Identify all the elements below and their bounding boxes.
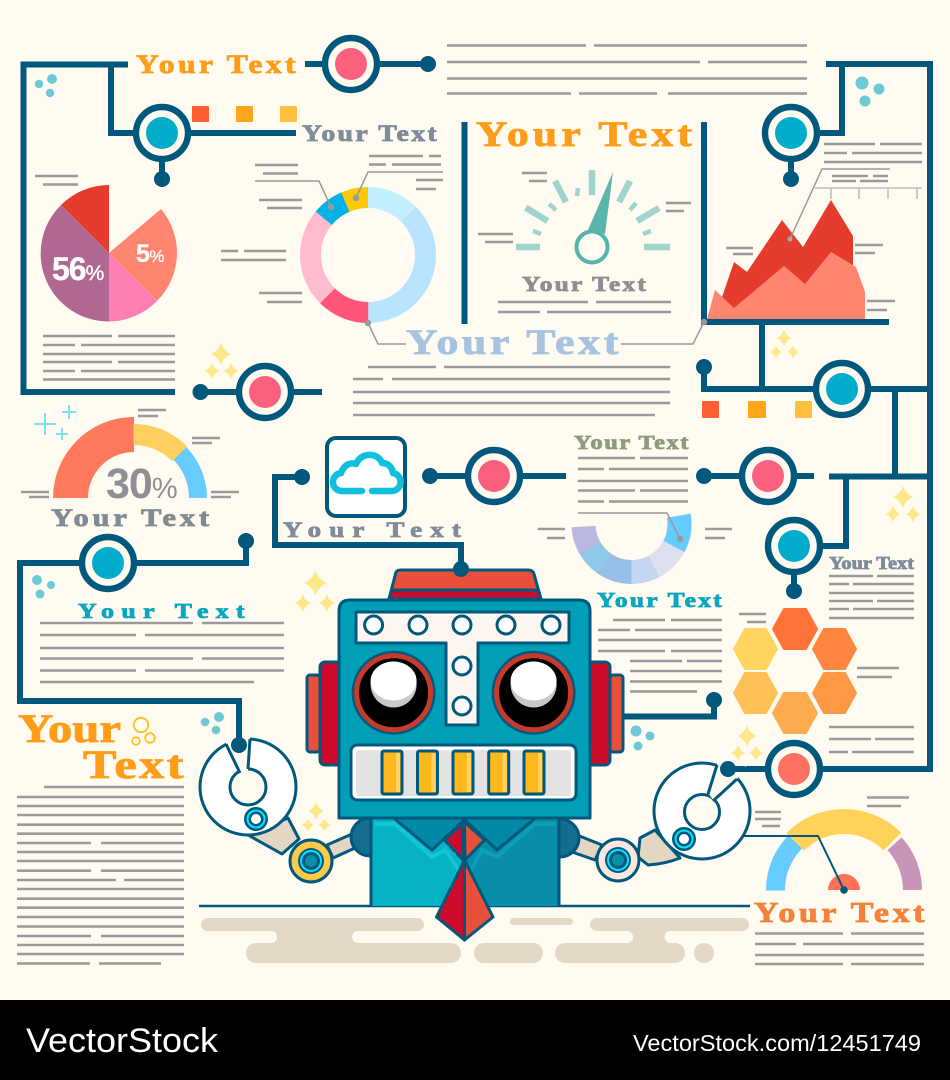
donut leader lines xyxy=(255,172,443,344)
T panel xyxy=(356,612,569,725)
robot xyxy=(200,561,750,940)
right eye xyxy=(492,651,576,735)
left paragraph xyxy=(40,623,284,682)
head xyxy=(339,600,590,818)
top node connector xyxy=(305,38,436,90)
top paragraph xyxy=(447,46,807,94)
arc gauge notes xyxy=(755,798,909,826)
chart sparkles xyxy=(770,330,799,359)
30% label: 30% xyxy=(106,460,177,508)
cloud connector xyxy=(275,469,461,569)
sparkles near hand xyxy=(302,802,330,832)
ears xyxy=(307,662,623,765)
gauge caption heading: Your Text xyxy=(522,272,648,296)
teal dots near hand xyxy=(201,712,224,734)
chart notes xyxy=(726,144,922,310)
heading: arc gauge: Your Text xyxy=(754,898,928,929)
mouth xyxy=(351,745,576,800)
gauge notes xyxy=(478,173,691,242)
plus signs xyxy=(34,405,76,440)
robot ear connector xyxy=(623,692,722,716)
speedometer gauge xyxy=(516,170,670,262)
top-left frame connector xyxy=(24,64,296,392)
teal dots xyxy=(630,726,654,750)
collar xyxy=(394,818,463,850)
icon: cloud xyxy=(327,438,405,516)
olive paragraph xyxy=(578,458,688,502)
heading: hexagon section: Your Text xyxy=(829,553,914,573)
heading: teal right: Your Text xyxy=(597,588,724,612)
teal dots xyxy=(32,575,55,598)
heading: gauge panel: Your Text xyxy=(476,114,696,154)
heading: large orange Text: Text xyxy=(83,742,186,787)
bottom-left paragraph xyxy=(17,787,184,964)
bottom-right arc gauge xyxy=(743,793,941,987)
gauge caption lines xyxy=(498,302,671,312)
legend squares right xyxy=(702,401,812,418)
hexagon chart xyxy=(734,609,856,733)
hat xyxy=(389,570,541,599)
heading: olive: Your Text xyxy=(574,432,690,454)
left eye xyxy=(352,651,436,735)
decoration: teal dots xyxy=(35,74,57,97)
half donut notes xyxy=(538,529,732,538)
heading: large orange Your: Your xyxy=(18,706,121,751)
axis and ticks xyxy=(815,188,922,199)
heading: teal left: Your Text xyxy=(78,599,252,623)
top-right frame connector xyxy=(765,64,930,769)
sparkles near bottom node xyxy=(731,726,763,761)
watermark left: VectorStock xyxy=(26,1022,219,1060)
pie caption lines xyxy=(35,176,175,380)
30% semicircle gauge xyxy=(44,408,224,588)
donut notes xyxy=(221,156,443,302)
right hand xyxy=(654,755,750,859)
heading: 30% gauge: Your Text xyxy=(51,505,213,532)
middle-right connector xyxy=(696,322,930,476)
label 56%: 56% xyxy=(52,251,104,287)
yellow bubbles xyxy=(132,718,155,745)
watermark bar xyxy=(0,1000,950,1080)
node connector with sparkles xyxy=(192,343,322,418)
sparkles right xyxy=(886,486,920,522)
heading: cloud: Your Text xyxy=(283,517,469,542)
left arm xyxy=(248,818,389,882)
donut chart xyxy=(287,174,449,336)
central paragraph xyxy=(353,367,670,415)
bottom node connector xyxy=(728,743,820,795)
title: orange top heading: Your Text xyxy=(136,50,299,79)
right arm xyxy=(541,819,680,881)
left connector frame xyxy=(20,533,254,745)
sparkles left of robot xyxy=(295,570,335,612)
cloud node connector xyxy=(422,450,566,502)
gauge panel rules xyxy=(464,122,889,324)
right-side connector xyxy=(768,476,846,599)
right-of-robot paragraph xyxy=(598,620,722,692)
leader to chart xyxy=(621,319,707,344)
ground line xyxy=(199,905,750,907)
decoration: teal dots right xyxy=(856,76,884,106)
legend squares top-left xyxy=(192,106,297,122)
watermark right: VectorStock.com/12451749 xyxy=(633,1030,921,1056)
label 5%: 5% xyxy=(136,240,164,268)
arc gauge paragraph xyxy=(755,934,924,964)
gauge 30% notes xyxy=(21,410,239,497)
left hand xyxy=(200,730,296,835)
heading: central blue: Your Text xyxy=(406,322,622,362)
heading: donut section: Your Text xyxy=(302,121,439,146)
area chart xyxy=(707,169,922,319)
chart leader xyxy=(790,169,890,239)
hexagon section lines xyxy=(739,576,914,752)
half donut leader xyxy=(578,513,683,542)
antenna dot xyxy=(453,561,469,577)
tie xyxy=(436,822,493,940)
ground blobs xyxy=(201,918,749,963)
half donut chart xyxy=(565,457,698,591)
right node connector xyxy=(696,450,814,502)
body xyxy=(371,816,559,906)
pie chart xyxy=(41,185,177,322)
